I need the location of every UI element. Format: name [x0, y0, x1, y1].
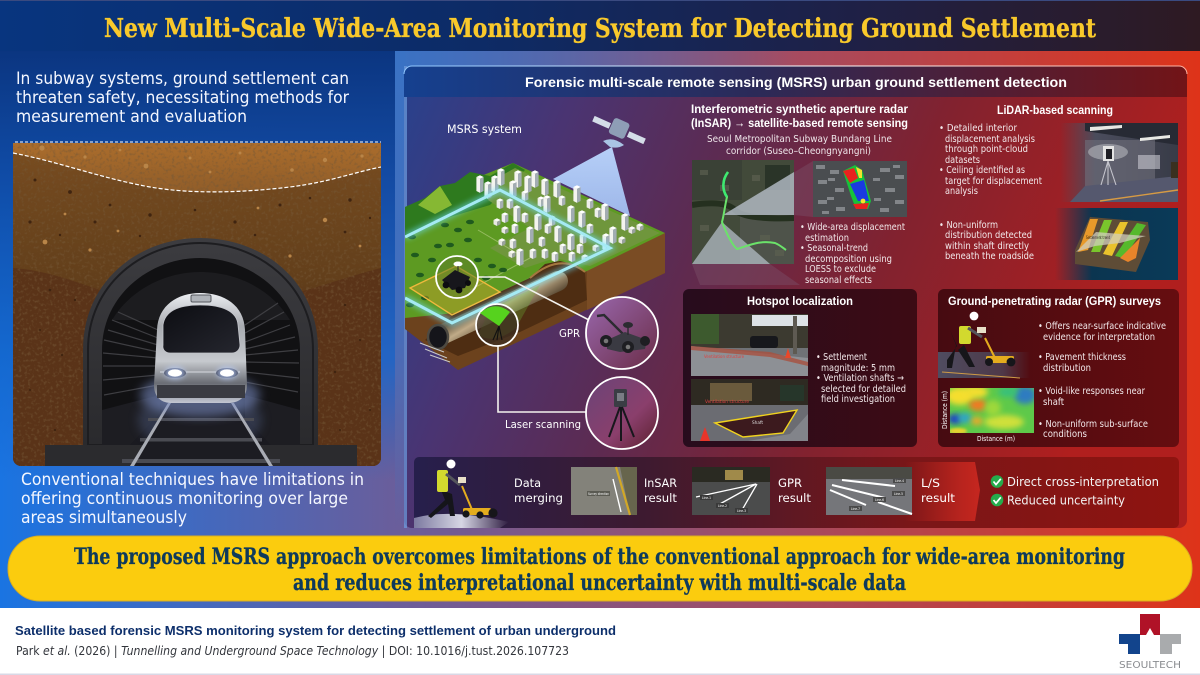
terrain surface — [405, 163, 665, 318]
label: InSAR result: result — [644, 491, 677, 505]
InSAR bullets: seasonal effects — [805, 275, 872, 286]
photo: scanner in underground space — [1060, 123, 1178, 202]
satellite map — [692, 160, 794, 264]
icon: operator with GPR cart — [414, 460, 509, 528]
LiDAR bullets: shaft: beneath the roadside — [945, 251, 1034, 262]
panel: hotspot localization — [683, 289, 917, 447]
logo: SeoulTech — [1119, 614, 1181, 671]
benefit: reduced uncertainty: Reduced uncertainty — [1007, 494, 1125, 508]
hotspot bullets: selected for detailed — [821, 384, 906, 395]
left column backdrop — [0, 50, 395, 480]
LiDAR bullets: interior: • Ceiling identified as — [939, 165, 1025, 176]
label: GPR: GPR — [559, 327, 580, 340]
text block: safety intro — [16, 69, 349, 126]
arrow — [905, 462, 980, 521]
callout: laser scan in tunnel — [476, 304, 518, 346]
text block: limitations: areas simultaneously — [21, 508, 187, 527]
InSAR location — [707, 134, 892, 157]
LiDAR bullets: interior: • Detailed interior — [939, 123, 1017, 134]
citation title: Satellite based forensic MSRS monitoring system for detecting settlement of urban underground — [15, 623, 616, 638]
photo: shaft at night: Ventilation structure — [705, 399, 749, 405]
label: data merging — [514, 476, 563, 505]
hotspot bullets: • Settlement — [816, 352, 867, 363]
LiDAR bullets: shaft: distribution detected — [945, 230, 1032, 241]
label: data merging: merging — [514, 491, 563, 505]
section: InSAR — [691, 102, 908, 286]
icon: satellite beam — [553, 109, 649, 216]
buildings — [476, 168, 644, 266]
GPR bullets: • Non-uniform sub-surface — [1038, 419, 1148, 430]
connector lines — [478, 277, 589, 412]
icon: laser scanner on tripod — [586, 377, 658, 449]
LiDAR point cloud image — [1055, 208, 1178, 280]
footer — [0, 608, 1200, 675]
logo: SeoulTech: SEOULTECH — [1119, 660, 1181, 671]
title bar — [0, 0, 1200, 51]
InSAR bullets: • Wide-area displacement — [800, 222, 905, 233]
label: InSAR result: InSAR — [644, 476, 677, 490]
panel gutter tint — [395, 50, 405, 530]
photo: operator with GPR cart — [938, 312, 1030, 378]
InSAR heading — [691, 102, 908, 130]
photo: GPR result: Line-1 — [702, 496, 711, 500]
benefit: direct cross-interpretation: Direct cross-interpretation — [1007, 475, 1159, 489]
photo: L/S result: Line-5 — [894, 492, 903, 496]
GPR heat map — [950, 388, 1034, 433]
text block: limitations — [21, 470, 364, 527]
top gutter tint — [395, 50, 795, 67]
text block: safety intro: threaten safety, necessitating methods for — [16, 88, 349, 107]
hotspot bullets: • Ventilation shafts → — [816, 373, 904, 384]
text block: limitations: Conventional techniques have limitations in — [21, 470, 364, 489]
InSAR bullets: LOESS to exclude — [805, 264, 876, 275]
LiDAR bullets: interior: target for displacement — [945, 176, 1042, 187]
InSAR bullets — [800, 222, 905, 286]
LiDAR bullets: interior — [939, 123, 1042, 197]
GPR zone — [410, 266, 500, 315]
LiDAR point cloud image: Settlement trend — [1086, 235, 1110, 241]
road lines — [470, 230, 530, 290]
displacement heat image — [813, 161, 907, 217]
LiDAR bullets: interior: through point-cloud — [945, 144, 1028, 155]
photo: InSAR result — [571, 467, 637, 515]
hotspot bullets: field investigation — [821, 394, 895, 405]
photo: GPR result: Line-2 — [718, 504, 727, 508]
LiDAR bullets: interior: datasets — [945, 155, 980, 166]
scan corridor — [405, 190, 610, 323]
LiDAR bullets: shaft: • Non-uniform — [939, 220, 998, 231]
icon: GPR cart — [586, 297, 658, 369]
label: laser scanning: Laser scanning — [505, 418, 581, 431]
InSAR bullets: estimation — [805, 233, 849, 244]
GPR map axis labels: Distance (m) — [977, 435, 1015, 443]
tube — [437, 281, 558, 337]
photo: GPR result — [692, 467, 770, 515]
GPR bullets: distribution — [1043, 363, 1091, 374]
InSAR heading: (InSAR) → satellite-based remote sensing — [691, 116, 908, 130]
photo: ventilation opening — [691, 314, 808, 376]
label: L/S result: result — [921, 491, 955, 505]
hotspot bullets: magnitude: 5 mm — [821, 363, 895, 374]
zoom wedges — [692, 161, 813, 285]
photo: L/S result: Line-4 — [895, 479, 905, 483]
text block: safety intro: measurement and evaluation — [16, 107, 247, 126]
text block: safety intro: In subway systems, ground settlement can — [16, 69, 349, 88]
mountains — [405, 163, 525, 238]
GPR bullets: • Pavement thickness — [1038, 352, 1126, 363]
label: L/S result: L/S — [921, 476, 940, 490]
label: L/S result — [921, 476, 955, 505]
photo: L/S result — [826, 467, 912, 515]
label: MSRS system: MSRS system — [447, 123, 522, 136]
callout: conclusion banner — [8, 536, 1192, 601]
label: GPR result: result — [778, 491, 811, 505]
LiDAR bullets: interior: analysis — [945, 186, 978, 197]
GPR map axis labels — [941, 391, 1015, 443]
panel: GPR surveys — [938, 289, 1179, 447]
LiDAR bullets: shaft: within shaft directly — [945, 241, 1029, 252]
tunnel arch — [83, 238, 318, 445]
callout: conclusion banner: and reduces interpretational uncertainty with multi-scale data — [293, 570, 906, 596]
photo: ventilation opening: Ventilation structure — [704, 354, 744, 360]
LiDAR bullets: shaft — [939, 220, 1034, 262]
GPR bullets — [1038, 321, 1166, 440]
InSAR bullets: decomposition using — [805, 254, 892, 265]
tunnel ribs — [103, 303, 299, 395]
soil pebbles — [39, 145, 364, 258]
illustration: isometric city and tunnel block — [405, 163, 665, 370]
panel heading — [404, 66, 1187, 97]
GPR map axis labels: Distance (m) — [941, 391, 949, 429]
LiDAR heading: LiDAR-based scanning — [997, 103, 1113, 117]
city ground — [488, 168, 660, 268]
panel: data merging strip — [414, 457, 1179, 528]
citation details: Park et al. (2026) | Tunnelling and Underground Space Technology | DOI: 10.1016/j.tust.2026.107723 — [16, 644, 569, 658]
InSAR location: Seoul Metropolitan Subway Bundang Line — [707, 134, 892, 145]
photo: L/S result: Line-7 — [851, 507, 860, 511]
InSAR heading: Interferometric synthetic aperture radar — [691, 102, 908, 116]
GPR bullets: conditions — [1043, 429, 1087, 440]
InSAR location: corridor (Suseo–Cheongnyangni) — [726, 146, 871, 157]
photo: shaft at night — [691, 379, 808, 441]
hotspot heading: Hotspot localization — [747, 294, 853, 308]
trench — [425, 261, 587, 356]
label: GPR result — [778, 476, 811, 505]
LiDAR bullets: interior: displacement analysis — [945, 134, 1035, 145]
text block: limitations: offering continuous monitoring over large — [21, 489, 348, 508]
GPR bullets: • Offers near-surface indicative — [1038, 321, 1166, 332]
label: InSAR result — [644, 476, 677, 505]
photo: shaft at night: Shaft — [752, 420, 763, 426]
GPR bullets: • Void-like responses near — [1038, 386, 1145, 397]
icon: train — [140, 293, 260, 417]
GPR heading: Ground-penetrating radar (GPR) surveys — [948, 294, 1161, 308]
InSAR bullets: • Seasonal-trend — [800, 243, 868, 254]
GPR bullets: shaft — [1043, 397, 1064, 408]
GPR bullets: evidence for interpretation — [1043, 332, 1155, 343]
section: LiDAR — [939, 103, 1178, 280]
platform — [45, 445, 357, 466]
panel: forensic MSRS detection — [404, 66, 1187, 528]
label: GPR result: GPR — [778, 476, 802, 490]
callout: GPR rover on site — [436, 256, 478, 298]
soil block — [405, 271, 665, 370]
panel heading: Forensic multi-scale remote sensing (MSRS) urban ground settlement detection — [525, 75, 1067, 91]
hotspot bullets — [816, 352, 906, 405]
label: data merging: Data — [514, 476, 541, 490]
trees — [406, 220, 507, 307]
photo: L/S result: Line-6 — [875, 498, 885, 502]
photo: InSAR result: Survey direction — [588, 492, 609, 496]
track — [110, 403, 290, 466]
photo: GPR result: Line-3 — [737, 509, 746, 513]
